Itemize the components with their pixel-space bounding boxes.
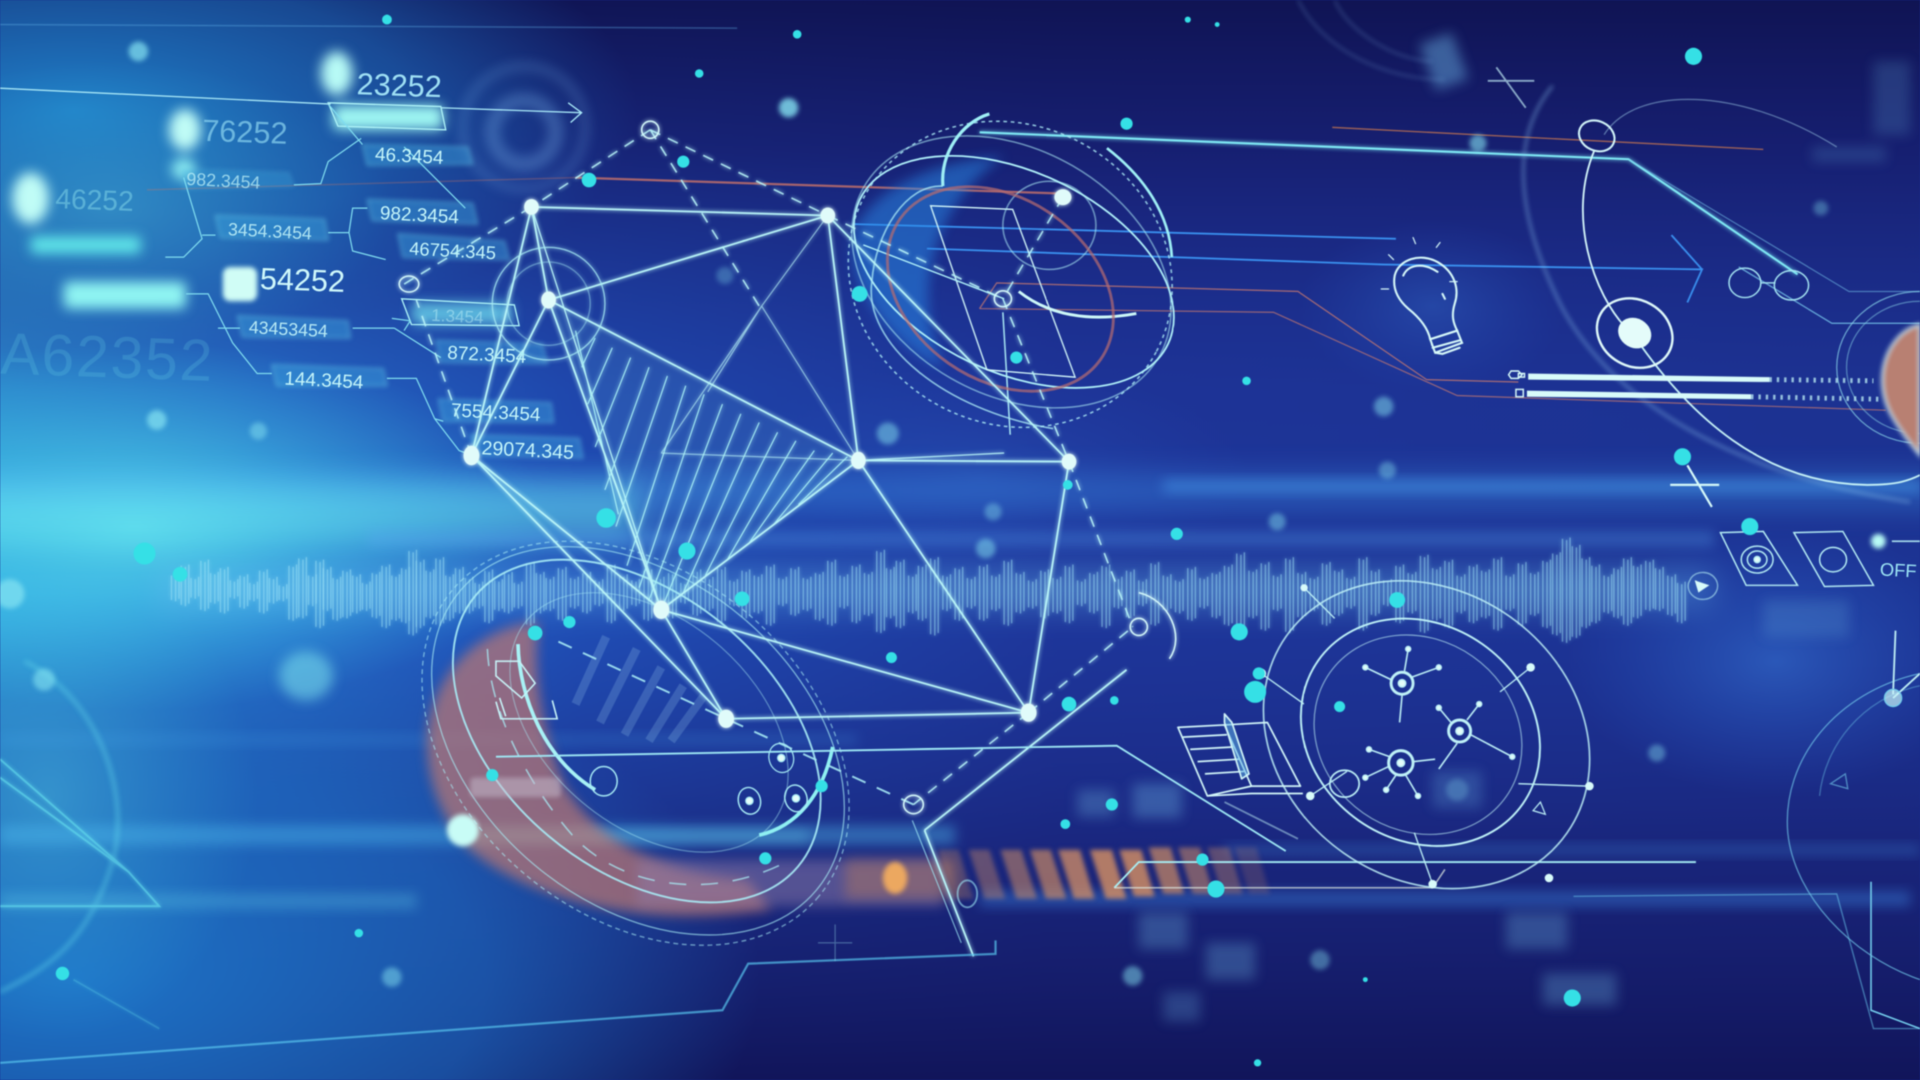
label numbers: 46754.345 [409, 238, 497, 263]
right lower dial [1787, 631, 1920, 1029]
label numbers [0, 67, 575, 464]
upper right orbit [1298, 0, 1920, 502]
progress bars [1509, 371, 1880, 399]
molecule: bottom [1363, 747, 1435, 798]
crosshair marks [1488, 67, 1719, 507]
ring around node [492, 247, 605, 360]
label numbers: 872.3454 [447, 343, 527, 368]
label numbers: 982.3454 [186, 169, 261, 193]
lower circuit lines [0, 746, 1920, 1063]
label numbers: 1.3454 [431, 305, 485, 328]
label numbers: 46.3454 [374, 144, 444, 169]
connector lines [165, 104, 473, 456]
hatched triangle [549, 300, 858, 610]
control squares and OFF switch: OFF [1879, 559, 1917, 581]
control squares and OFF switch [1688, 531, 1920, 599]
icon: open book [1178, 714, 1303, 796]
label boxes [181, 144, 583, 458]
network polyhedron [399, 121, 1176, 956]
left blurred triangle [0, 661, 159, 1029]
icon: light bulb [1381, 238, 1462, 354]
nodes [463, 189, 1076, 728]
label numbers: 43453454 [248, 317, 328, 341]
label numbers: 76252 [202, 114, 288, 151]
top and orange circuit lines [0, 24, 1920, 410]
label numbers: 7554.3454 [450, 400, 541, 426]
lower sphere disc [342, 458, 929, 1028]
label numbers: 23252 [356, 67, 442, 104]
label numbers: 144.3454 [284, 369, 364, 394]
orange highlights and progress strip [427, 622, 1270, 916]
download icon [496, 661, 557, 719]
background target dial [463, 66, 585, 189]
waveform [171, 538, 1685, 643]
label numbers: 54252 [259, 262, 346, 299]
label numbers: 29074.345 [481, 437, 575, 464]
molecule: top [1363, 647, 1441, 722]
arrow [0, 88, 582, 122]
molecule: right [1436, 702, 1515, 769]
blurred background blocks [279, 33, 1910, 1021]
label numbers: 46252 [55, 183, 134, 217]
blurred glowing labels [12, 51, 512, 324]
molecule dial [1203, 518, 1650, 951]
label numbers: A62352 [0, 322, 215, 394]
label numbers: 3454.3454 [228, 219, 313, 243]
hatch stripes [576, 637, 704, 741]
label numbers: 982.3454 [379, 203, 459, 228]
upper sphere disc [794, 65, 1226, 484]
data labels panel [0, 51, 583, 464]
